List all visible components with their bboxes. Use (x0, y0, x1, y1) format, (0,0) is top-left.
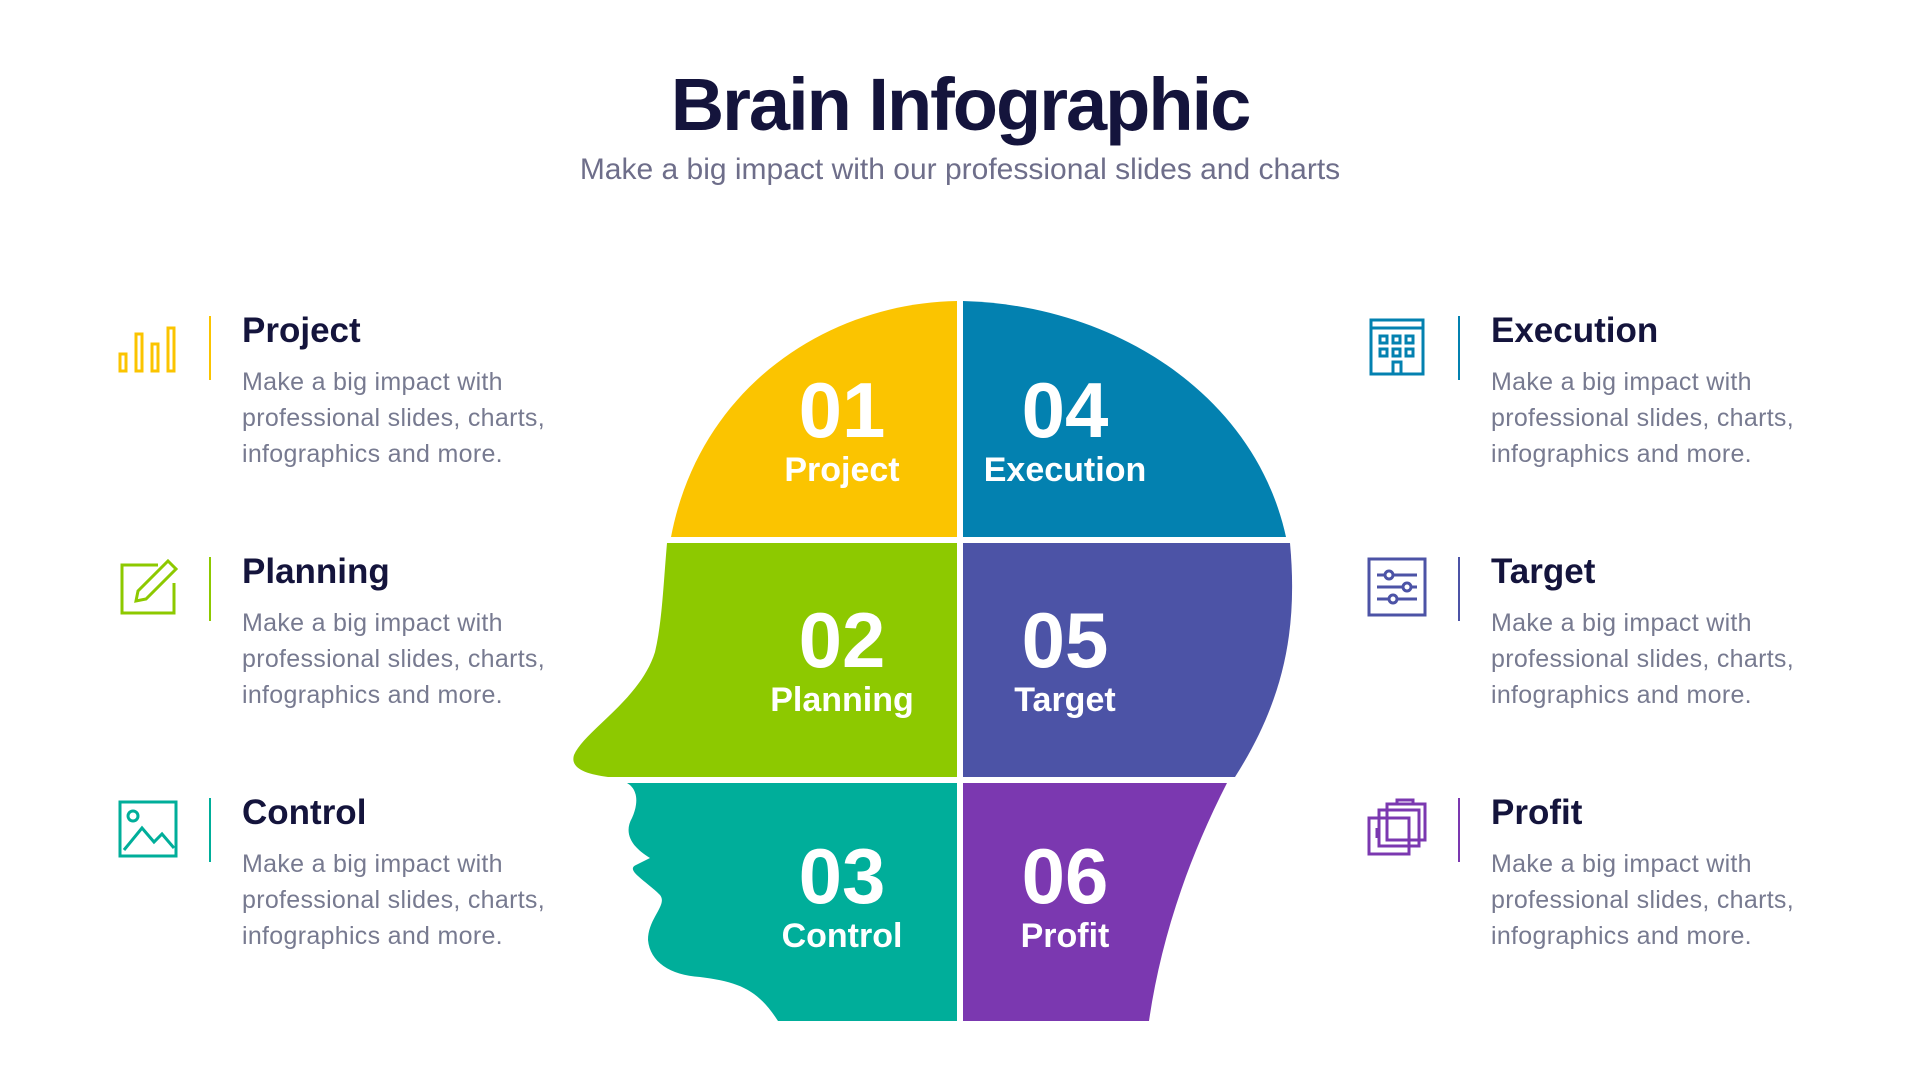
item: execution: Make a big impact with (1491, 368, 1752, 396)
item: project (118, 311, 545, 468)
subtitle: Make a big impact with our professional slides and charts (580, 153, 1340, 186)
item: planning: infographics and more. (242, 681, 503, 709)
item: project: Project (242, 311, 361, 350)
item: execution (1370, 311, 1794, 468)
segment 02 planning: Planning (770, 681, 914, 719)
segment 06 profit: 06 (1022, 832, 1108, 920)
segment 05 target: Target (1014, 681, 1116, 719)
segment 01 project: Project (784, 451, 900, 489)
segment 03 control: 03 (799, 832, 885, 920)
icon: briefcases (1368, 798, 1426, 856)
item: control (118, 793, 545, 950)
item: execution: Execution (1491, 311, 1658, 350)
item: project: infographics and more. (242, 440, 503, 468)
segment 04 execution: 04 (1022, 366, 1108, 454)
icon: bar chart (118, 326, 176, 372)
icon: sliders (1368, 558, 1426, 616)
item: target (1368, 552, 1794, 709)
segment 02 planning (573, 543, 957, 777)
item: planning: Make a big impact with (242, 609, 503, 637)
item: control: professional slides, charts, (242, 886, 545, 914)
icon: pencil (120, 559, 178, 614)
item: planning (120, 552, 545, 709)
item: project: professional slides, charts, (242, 404, 545, 432)
item: target: professional slides, charts, (1491, 645, 1794, 673)
item: target: Make a big impact with (1491, 609, 1752, 637)
item: profit: Profit (1491, 793, 1582, 832)
segment 01 project (671, 301, 957, 537)
item: project: Make a big impact with (242, 368, 503, 396)
segment 04 execution (963, 301, 1286, 537)
segment 06 profit (963, 783, 1227, 1021)
item: target: Target (1491, 552, 1595, 591)
segment 06 profit: Profit (1021, 917, 1109, 955)
segment 03 control (627, 783, 957, 1021)
segment 03 control: Control (782, 917, 902, 955)
item: execution: infographics and more. (1491, 440, 1752, 468)
icon: building (1370, 318, 1424, 376)
item: profit: infographics and more. (1491, 922, 1752, 950)
item: profit (1368, 793, 1794, 950)
item: control: infographics and more. (242, 922, 503, 950)
segment 02 planning: 02 (799, 596, 885, 684)
item: target: infographics and more. (1491, 681, 1752, 709)
item: control: Control (242, 793, 366, 832)
item: profit: Make a big impact with (1491, 850, 1752, 878)
segment 05 target: 05 (1022, 596, 1108, 684)
segment 01 project: 01 (799, 366, 885, 454)
segment 05 target (963, 543, 1292, 777)
item: execution: professional slides, charts, (1491, 404, 1794, 432)
item: planning: Planning (242, 552, 390, 591)
title: Brain Infographic (671, 63, 1249, 146)
item: planning: professional slides, charts, (242, 645, 545, 673)
segment 04 execution: Execution (984, 451, 1146, 489)
icon: image (118, 800, 178, 858)
item: control: Make a big impact with (242, 850, 503, 878)
item: profit: professional slides, charts, (1491, 886, 1794, 914)
